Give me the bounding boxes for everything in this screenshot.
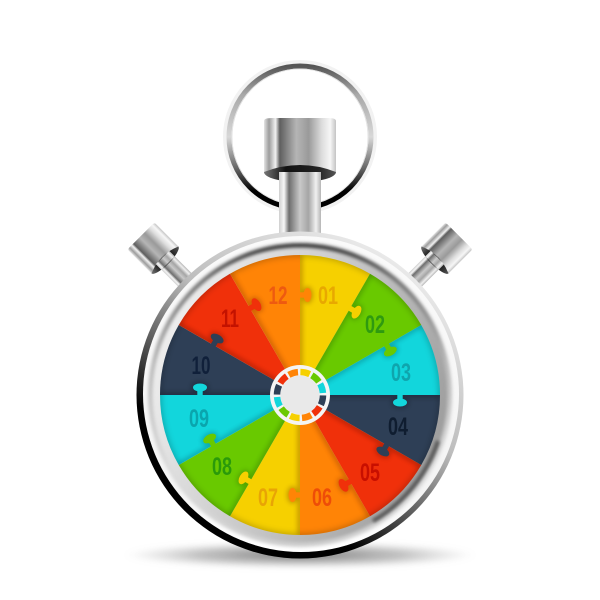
dial wedges [160,255,440,535]
label 12: 12 [268,282,288,310]
wedge 11 red [178,274,285,380]
stopwatch infographic [128,60,472,568]
label 06: 06 [312,484,332,512]
label 07: 07 [258,484,278,512]
label 09: 09 [189,405,209,433]
wedge 02 green [315,274,422,380]
pull ring [226,64,374,210]
wedge 01 yellow [300,255,370,369]
center hub [270,365,330,425]
hub colour segments [275,370,325,420]
wedge 08 green [178,410,285,516]
wedge 05 red [315,410,422,516]
wedge 12 orange [230,255,300,369]
label 02: 02 [365,311,385,339]
label 05: 05 [360,459,380,487]
label 10: 10 [192,352,210,380]
wedge 09 cyan [160,395,274,465]
label 08: 08 [212,453,232,481]
number labels [189,282,411,512]
label 03: 03 [391,359,411,387]
wedge 04 navy [326,395,440,465]
dial inner shadow [158,253,442,537]
label 01: 01 [318,282,338,310]
label 11: 11 [221,305,239,333]
wedge 06 orange [300,421,370,535]
ground shadow [125,542,475,568]
right side button [394,222,473,301]
wedge 10 navy [160,325,274,395]
wedge 03 cyan [326,325,440,395]
stem [279,172,321,236]
crown [264,118,336,182]
label 04: 04 [388,413,408,441]
watch case [136,232,464,558]
left side button [127,222,206,301]
wedge 07 yellow [230,421,300,535]
